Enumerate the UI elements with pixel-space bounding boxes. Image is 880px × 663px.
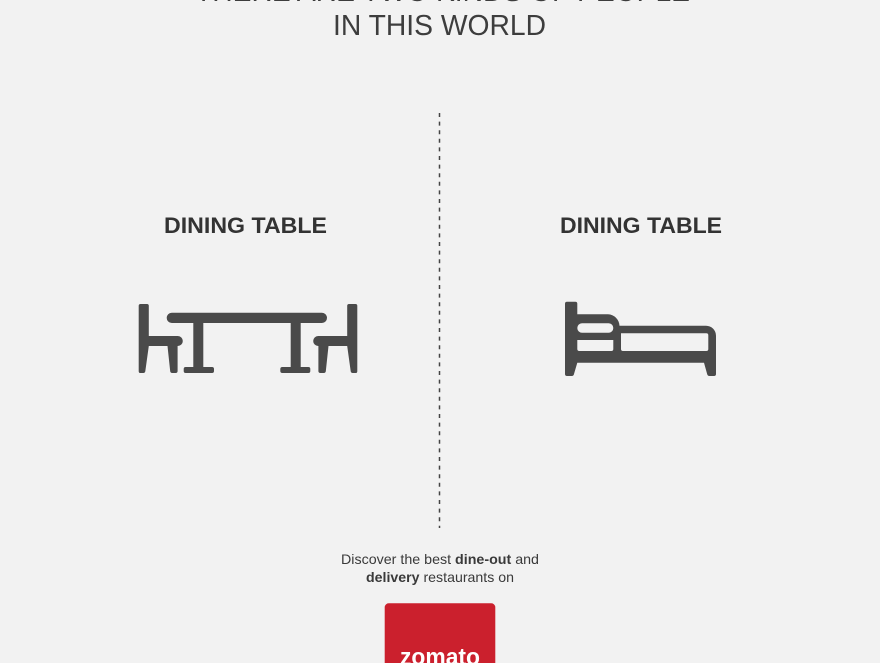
panel: left: [139, 213, 357, 373]
logo: zomato: [385, 603, 495, 663]
icon: bed: [565, 302, 716, 376]
footer text: [341, 551, 539, 585]
icon: dining table with two chairs: [139, 304, 357, 373]
footer text: delivery restaurants on: [366, 569, 514, 585]
title: [195, 0, 690, 42]
footer text: Discover the best dine-out and: [341, 551, 539, 567]
panel: right: [560, 213, 722, 376]
title: IN THIS WORLD: [333, 10, 546, 42]
heading: right dining table: DINING TABLE: [560, 213, 722, 238]
heading: left dining table: DINING TABLE: [164, 213, 327, 238]
